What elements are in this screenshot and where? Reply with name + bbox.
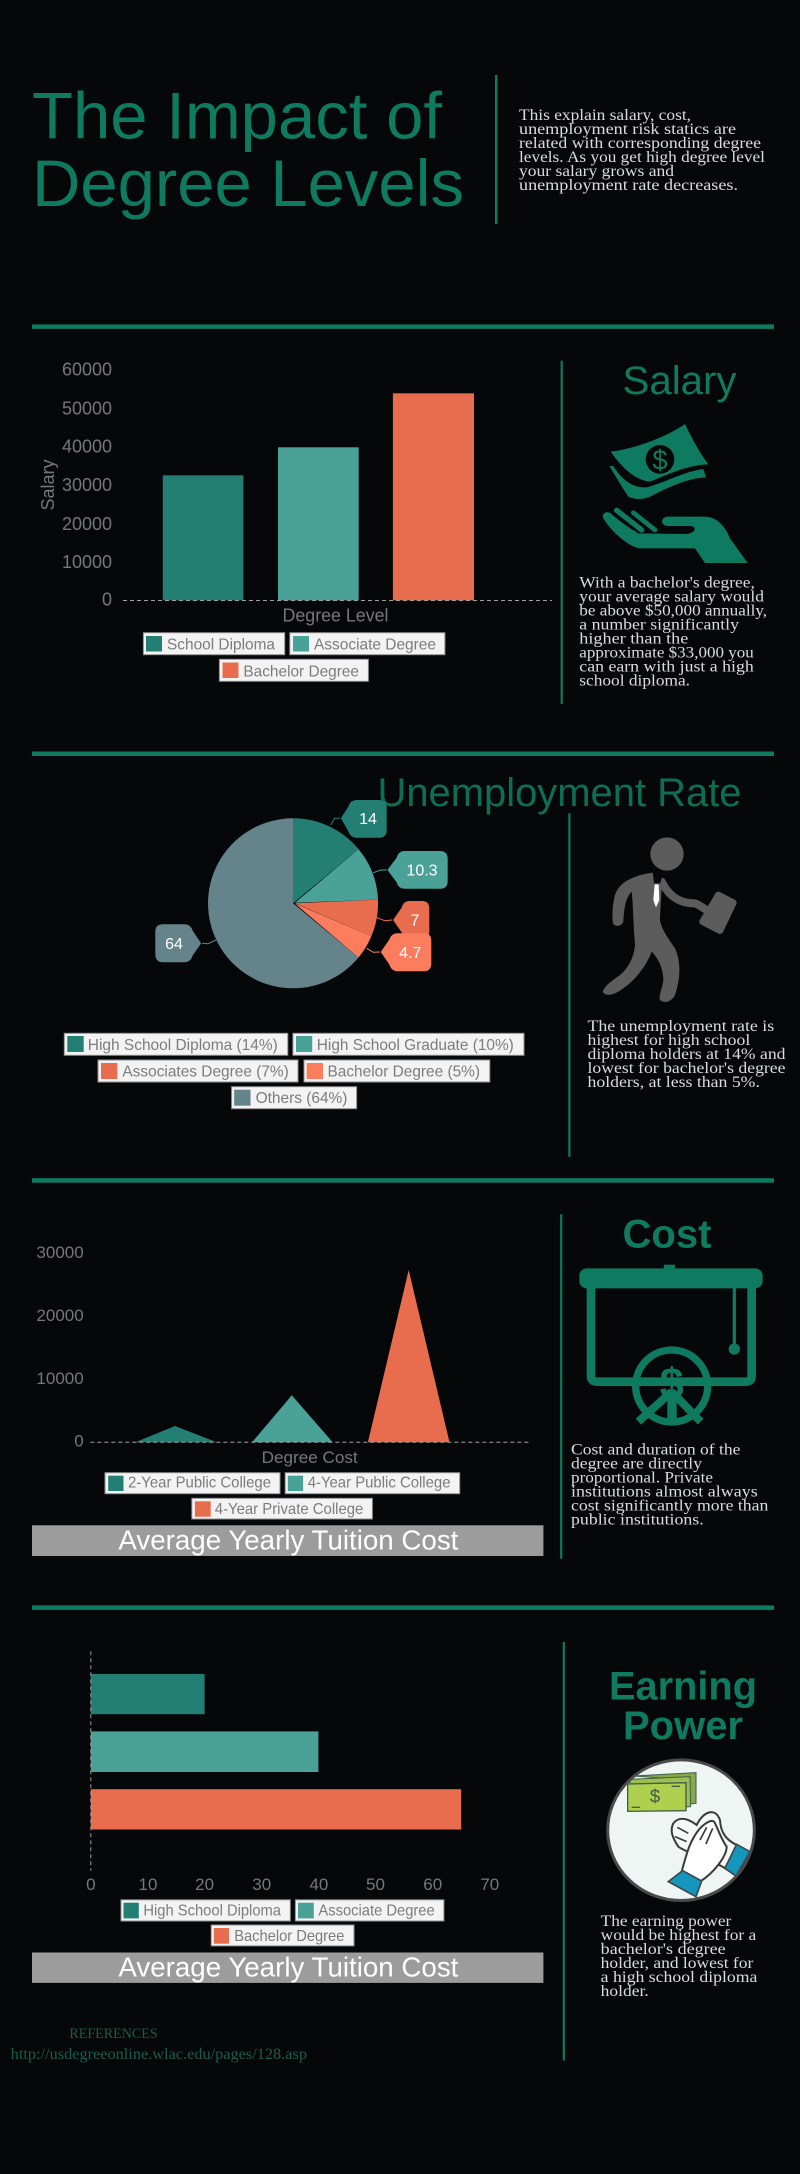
salary legend: School Diploma [167,636,275,653]
earning legend: High School Diploma [143,1902,281,1920]
earning horizontal bar chart: 50 [366,1875,385,1894]
cost legend: 2-Year Public College [128,1475,271,1492]
salary text: school diploma. [579,672,690,689]
callout 64 [156,925,216,961]
cost legend: 4-Year Private College [215,1501,363,1518]
salary text: With a bachelor's degree, [579,574,755,591]
callout 10.3 [373,852,447,888]
unemployment heading: Unemployment Rate [378,771,742,815]
earning legend: Associate Degree [318,1902,435,1920]
unemployment text: holders, at less than 5%. [588,1074,760,1091]
salary bar chart: Salary [38,459,58,511]
salary bar chart: 60000 [62,360,112,380]
panel: unemployment rate [64,771,786,1157]
earning text: bachelor's degree [601,1941,726,1958]
cost legend [105,1473,460,1519]
cost text: institutions almost always [571,1484,758,1501]
unemployment text: highest for high school [588,1032,750,1049]
callout 4.7 [367,934,430,970]
earning horizontal bar chart [86,1651,499,1894]
cost text: proportional. Private [571,1470,713,1487]
salary heading: Salary [622,359,736,403]
header divider [495,75,498,224]
unemployment legend: Associates Degree (7%) [122,1064,289,1080]
earning legend [121,1900,444,1946]
salary bar chart [38,360,552,626]
salary text: your average salary would [579,588,764,605]
intro text: related with corresponding degree [519,135,761,152]
salary bar chart: 10000 [62,552,112,572]
icon: money and clapping hands: $ [650,1786,661,1807]
unemployment text [588,1018,786,1091]
references: http://usdegreeonline.wlac.edu/pages/128.asp [11,2046,307,2063]
title second line: Degree Levels [32,147,464,220]
salary legend: Associate Degree [314,636,436,653]
unemployment pie chart [156,801,447,988]
cost text: public institutions. [571,1512,704,1529]
intro text: your salary grows and [519,163,674,180]
salary bar chart: 40000 [62,437,112,457]
earning text: holder. [601,1983,649,2000]
callout 4.7: 4.7 [399,945,422,962]
cost heading: Cost [622,1213,712,1257]
earning heading: Power [623,1704,743,1748]
unemployment legend: High School Diploma (14%) [88,1037,278,1054]
earning banner [32,1951,543,1983]
salary text: approximate $33,000 you [579,644,754,661]
references: REFERENCES [69,2026,158,2042]
unemployment legend: Others (64%) [256,1090,347,1107]
intro text: unemployment rate decreases. [519,177,738,194]
callout 14 [331,801,386,837]
title: The Impact of [32,80,443,152]
header panel [32,75,765,224]
earning horizontal bar chart: 20 [195,1875,214,1894]
cost divider [560,1214,562,1559]
salary bar chart: 20000 [62,514,112,534]
unemployment legend: Bachelor Degree (5%) [328,1064,480,1080]
cost banner: Average Yearly Tuition Cost [118,1524,459,1555]
cost triangle chart [36,1243,529,1467]
unemployment text: lowest for bachelor's degree [588,1060,786,1077]
earning horizontal bar chart: 0 [86,1875,96,1894]
icon: walking businessman [603,837,733,1002]
cost banner [32,1524,543,1556]
unemployment divider [568,813,570,1157]
panel: earning power [32,1642,757,2060]
earning banner: Average Yearly Tuition Cost [118,1951,459,1982]
cost text: Cost and duration of the [571,1442,741,1459]
intro text [519,107,765,194]
earning horizontal bar chart: 70 [480,1875,499,1894]
earning horizontal bar chart: 10 [139,1875,157,1894]
earning horizontal bar chart: 40 [309,1875,328,1894]
salary legend: Bachelor Degree [243,664,359,680]
callout 10.3: 10.3 [406,863,438,880]
unemployment text: diploma holders at 14% and [588,1046,786,1063]
callout 14: 14 [359,811,377,828]
callout 64: 64 [165,936,183,953]
salary bar chart: Degree Level [282,606,388,626]
salary bar chart: 30000 [62,475,112,495]
earning text: holder, and lowest for [601,1955,754,1972]
unemployment legend [64,1033,524,1109]
references [11,2026,307,2063]
earning horizontal bar chart: 30 [252,1875,271,1894]
icon: projector screen with coin [579,1265,763,1423]
intro text: This explain salary, cost, [519,107,691,124]
earning heading [609,1665,757,1748]
earning heading: Earning [609,1665,757,1709]
earning text: The earning power [601,1913,732,1930]
salary legend [143,633,445,681]
salary text: be above $50,000 annually, [579,602,767,619]
salary bar chart: 0 [102,590,112,610]
earning legend: Bachelor Degree [234,1928,344,1945]
salary divider [561,361,563,704]
cost legend: 4-Year Public College [308,1475,451,1492]
salary text [579,574,767,689]
salary text: higher than the [579,630,688,647]
earning text: would be highest for a [601,1927,756,1944]
callout 7: 7 [411,913,420,930]
icon: money and clapping hands [608,1760,754,1900]
cost triangle chart: 10000 [36,1369,84,1388]
salary text: can earn with just a high [579,658,754,675]
cost text: cost significantly more than [571,1498,769,1515]
panel: salary [38,359,767,704]
unemployment legend: High School Graduate (10%) [317,1037,514,1054]
earning text [601,1913,757,2000]
salary text: a number significantly [579,616,739,633]
earning divider [563,1642,565,2060]
cost triangle chart: 30000 [36,1243,84,1262]
icon: money over hand [603,424,748,563]
earning horizontal bar chart: 60 [423,1875,442,1894]
cost triangle chart: 20000 [36,1306,84,1325]
cost text [571,1442,769,1529]
intro text: unemployment risk statics are [519,121,736,138]
cost triangle chart: Degree Cost [262,1448,358,1467]
unemployment text: The unemployment rate is [588,1018,774,1035]
panel: cost [32,1213,769,1559]
callout 7 [377,902,428,938]
salary bar chart: 50000 [62,399,112,419]
cost triangle chart: 0 [74,1432,84,1451]
earning text: a high school diploma [601,1969,757,1986]
icon: projector screen with coin: $ [660,1360,684,1408]
icon: money over hand: $ [652,444,668,475]
intro text: levels. As you get high degree level [519,149,765,166]
cost text: degree are directly [571,1456,702,1473]
